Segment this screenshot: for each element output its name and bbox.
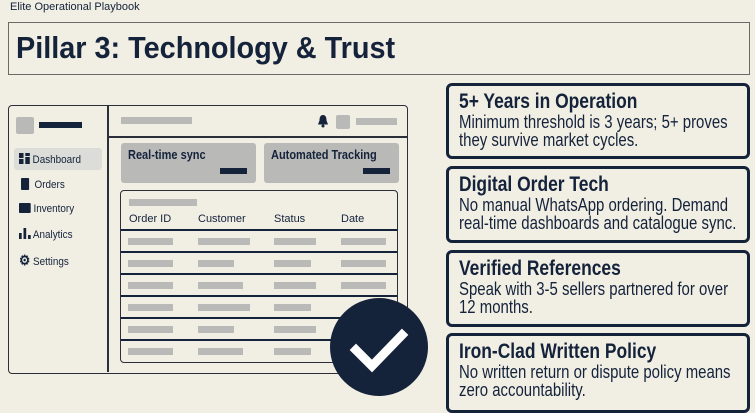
card: verified references (446, 250, 750, 327)
card: verified references: Verified References (459, 257, 621, 280)
card: 5+ years (446, 83, 750, 159)
card: automated tracking: Automated Tracking (271, 148, 377, 162)
nav settings: ⚙ Settings (19, 252, 69, 268)
dashboard mockup: Dashboard (33, 154, 81, 166)
orders table: Status (274, 213, 305, 225)
card: digital order tech: Digital Order Tech (459, 173, 609, 196)
card: iron-clad policy (446, 333, 750, 413)
nav orders: Orders (35, 179, 65, 191)
orders table: Date (341, 213, 364, 225)
card: digital order tech (446, 166, 750, 243)
card: digital order tech: No manual WhatsApp ordering. Demand real-time dashboards and catalogue sync. (459, 195, 736, 233)
title (8, 22, 750, 75)
nav orders (21, 178, 65, 191)
nav dashboard active (14, 148, 102, 170)
nav analytics: Analytics (33, 229, 73, 241)
card: verified references: Speak with 3-5 sellers partnered for over 12 months. (459, 279, 728, 317)
dashboard mockup (8, 105, 408, 374)
card: automated tracking (264, 143, 399, 183)
title: Pillar 3: Technology & Trust (16, 30, 395, 65)
header label: Elite Operational Playbook (10, 1, 140, 13)
nav inventory: Inventory (33, 203, 74, 215)
icon: check badge (330, 298, 428, 396)
logo (16, 117, 34, 134)
card: real-time sync (121, 143, 256, 183)
card: 5+ years: 5+ Years in Operation (459, 90, 637, 113)
card: iron-clad policy: No written return or dispute policy means zero accountability. (459, 362, 731, 400)
card: iron-clad policy: Iron-Clad Written Policy (459, 340, 656, 363)
orders table: Order ID (129, 213, 171, 225)
card: real-time sync: Real-time sync (128, 148, 206, 162)
orders table (120, 190, 398, 363)
nav analytics (19, 228, 73, 241)
icon: bell (318, 115, 328, 128)
orders table: Customer (198, 213, 246, 225)
card: 5+ years: Minimum threshold is 3 years; 5+ proves they survive market cycles. (459, 112, 728, 150)
